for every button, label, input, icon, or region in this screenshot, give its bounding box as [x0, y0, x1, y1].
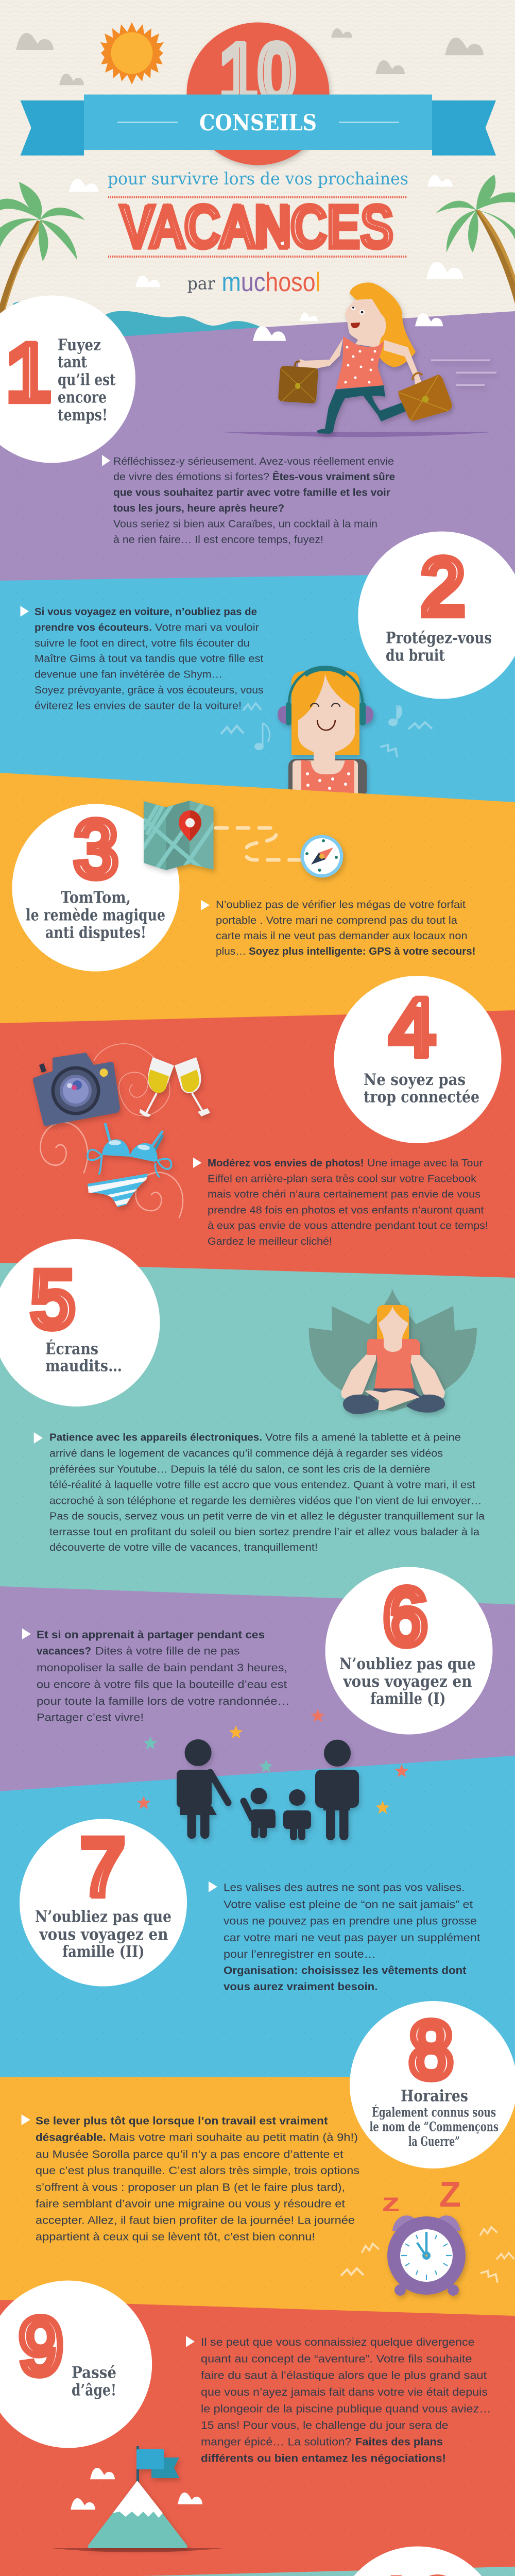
text: conseil 1: que vous souhaitez partir avec votre famille et les voir [113, 486, 390, 499]
number 7: 7 [80, 1821, 126, 1913]
number 6: 6 [383, 1570, 428, 1663]
icon: alarm clock [387, 2215, 466, 2296]
text: conseil 9: Faites des plans [355, 2436, 443, 2448]
text: conseil 8: faire semblant d’avoir une migraine ou vous y résoudre et [36, 2197, 345, 2210]
panel: conseil 1 [0, 282, 515, 582]
text: conseil 8: Se lever plus tôt que lorsque l’on travail est vraiment [36, 2114, 328, 2127]
circle: conseil 10 [334, 2546, 502, 2576]
panel: conseil 10 [0, 2546, 515, 2576]
illustration: running woman [219, 282, 496, 437]
text: conseil 7 [224, 1882, 480, 1993]
text: conseil 2: Maître Gims à tout va tandis que votre fille est [35, 653, 264, 665]
text: conseil 1: tous les jours, heure après heure? [113, 502, 284, 514]
text: conseil 3: N’oubliez pas de vérifier les mégas de votre forfait [216, 899, 466, 911]
text: conseil 5: terrasse tout en profitant du soleil ou bien sortez prendre l’air et allez vous balader à la [49, 1526, 480, 1538]
ribbon: conseils: CONSEILS [199, 110, 317, 136]
heading: passé d'âge: Passé [72, 2364, 116, 2382]
text: conseil 8: au Musée Sorolla parce qu’il n’y a pas encore d’attente et [36, 2148, 344, 2160]
panel: conseil 5 [0, 1239, 515, 1607]
text: conseil 8: s’offrent à vous : proposer un plan B (et le faire plus tard), [36, 2181, 345, 2193]
text: conseil 8: appartient à ceux qui se lèvent tôt, c’est bien connu! [36, 2230, 315, 2243]
text: conseil 5: accroché à son téléphone et regarde les dernières vidéos que l’on vient de lui envoyer… [49, 1495, 482, 1506]
text: conseil 4: mais votre chéri n’aura certainement pas envie de vous [208, 1189, 480, 1200]
circle: conseil 1 [0, 296, 135, 463]
text: conseil 5: Patience avec les appareils électroniques. [49, 1432, 262, 1444]
text: conseil 8 [36, 2114, 359, 2243]
heading: protégez-vous du bruit [386, 629, 492, 665]
icon: sleeping z letters: z [382, 2188, 400, 2217]
number 4: 4 [389, 981, 435, 1073]
text: conseil 9: manger épicé… La solution? [201, 2436, 351, 2448]
text: conseil 7: vous ne pouvez pas en prendre une plus grosse [224, 1915, 477, 1927]
text: conseil 3: plus… [216, 945, 246, 957]
circle: conseil 8 [350, 2001, 515, 2168]
text: conseil 2: prendre vos écouteurs. [35, 621, 152, 634]
heading: n'oubliez pas que vous voyagez en famille (II): vous voyagez en [39, 1925, 168, 1944]
text: conseil 2 [35, 606, 264, 712]
arrow: dashed route [216, 828, 301, 860]
text: conseil 5 [49, 1432, 485, 1553]
divider: top dots [108, 196, 407, 198]
panel: conseil 8 [0, 2001, 515, 2318]
arrow [209, 1882, 217, 1892]
text: conseil 7: car votre mari ne veut pas payer un supplément [224, 1931, 480, 1944]
panel: conseil 6 [0, 1567, 515, 1793]
text: conseil 1: Êtes-vous vraiment sûre [272, 470, 395, 483]
decorative zigzags: clock [341, 2226, 514, 2283]
heading: tomtom [26, 889, 165, 942]
title: vacances: VACANCES [121, 193, 393, 260]
text: conseil 5: préférées sur Youtube… Depuis la télé du salon, ce sont les cris de la dernière [49, 1463, 431, 1475]
heading: n'oubliez pas que vous voyagez en famille (I): vous voyagez en [343, 1672, 472, 1691]
text: conseil 2: suivre le foot en direct, votre fils écouter du [35, 637, 250, 649]
heading: écrans maudits: Écrans [45, 1338, 98, 1358]
icon: camera [33, 1053, 120, 1126]
text: conseil 4: prendre 48 fois en photos et vos enfants n’auront quant [208, 1204, 484, 1216]
icon: champagne glasses [139, 1057, 210, 1117]
panel: conseil 2 [0, 532, 515, 804]
text: conseil 1 [113, 455, 395, 546]
panel: conseil 4 [0, 976, 515, 1280]
text: conseil 4: Eiffel en arrière-plan sera très cool sur votre Facebook [208, 1173, 477, 1184]
text: conseil 2: éviterez les envies de sauter de la voiture! [35, 700, 242, 712]
icon: sun [100, 22, 164, 84]
text: conseil 5: découverte de votre ville de vacances, tranquillement! [49, 1541, 318, 1553]
badge: 10: 10 [219, 26, 296, 118]
panel: conseil 9 [0, 2280, 515, 2576]
circle: conseil 3 [12, 804, 179, 972]
text: conseil 7: pour l’enregistrer en soute… [224, 1948, 376, 1960]
heading: fuyez tant qu'il est encore temps: tant [58, 353, 88, 371]
text: conseil 2: devenue une fan invétérée de Shym… [35, 669, 222, 681]
illustration: meditating woman [309, 1289, 477, 1414]
heading: tomtom: TomTom, [61, 889, 131, 907]
heading: n'oubliez pas que vous voyagez en famille (I): famille (I) [370, 1690, 446, 1708]
icon: compass [301, 835, 343, 878]
text: conseil 1: de vivre des émotions si fortes? [113, 471, 269, 483]
text: conseil 6 [37, 1629, 289, 1724]
number 9: 9 [18, 2300, 64, 2392]
number 8: 8 [408, 2004, 454, 2096]
icon: sleeping z letters [382, 2174, 461, 2217]
text: conseil 8: accepter. Allez, il faut bien profiter de la journée! La journée [36, 2214, 355, 2227]
number 4: 4 [389, 981, 435, 1073]
text: conseil 5: télé-réalité à laquelle votre fille est accro que vous entendez. Quant à votre mari, il est [49, 1479, 475, 1490]
text: conseil 8: Mais votre mari souhaite au petit matin (à 9h!) [109, 2131, 358, 2144]
heading: protégez-vous du bruit: Protégez-vous [386, 629, 492, 647]
heading: horaires: Horaires [401, 2087, 468, 2105]
text: conseil 6: Dites à votre fille de ne pas [95, 1645, 240, 1657]
number 6: 6 [383, 1570, 428, 1663]
icon: bikini [85, 1123, 171, 1216]
heading: écrans maudits [45, 1338, 122, 1376]
heading: passé d'âge [72, 2364, 116, 2399]
clouds: over purple edge [253, 313, 443, 341]
text: conseil 9 [201, 2336, 491, 2465]
illustration: right palm tree [436, 175, 515, 304]
number 5: 5 [30, 1253, 76, 1345]
icon: stars [137, 1709, 409, 1814]
icon: map with pin [143, 801, 217, 875]
text: conseil 2: Si vous voyagez en voiture, n’oubliez pas de [35, 606, 257, 618]
text: conseil 7: Les valises des autres ne sont pas vos valises. [224, 1882, 465, 1894]
text: conseil 8: désagréable. [36, 2131, 106, 2144]
arrow [201, 900, 210, 910]
text: conseil 3: carte mais il ne veut pas demander aux locaux non [216, 930, 468, 942]
title: pour survivre lors de vos prochaines: pour survivre lors de vos prochaines [108, 168, 408, 189]
arrow [21, 606, 29, 617]
text: conseil 6: ou encore à votre fils que la bouteille d’eau est [37, 1679, 287, 1691]
text: conseil 9: quant au concept de “aventure”. Votre fils souhaite [201, 2353, 472, 2365]
arrow [186, 2336, 195, 2347]
number 2: 2 [420, 540, 466, 633]
number 7: 7 [80, 1821, 126, 1913]
arrow [193, 1158, 202, 1168]
clouds: header [16, 28, 484, 287]
text: conseil 4: Gardez le meilleur cliché! [208, 1235, 332, 1247]
arrow [22, 2114, 30, 2125]
logo: par muchosol: muchosol [221, 267, 320, 297]
text: conseil 6: vacances? [37, 1645, 91, 1657]
heading: écrans maudits: maudits… [45, 1357, 122, 1376]
circle: conseil 5 [0, 1239, 160, 1406]
text: conseil 9: Il se peut que vous connaissiez quelque divergence [201, 2336, 475, 2348]
text: conseil 1: à ne rien faire… Il est encore temps, fuyez! [113, 534, 323, 546]
number 3: 3 [73, 803, 119, 895]
heading: n'oubliez pas que vous voyagez en famille (II): famille (II) [62, 1942, 145, 1961]
ribbon: conseils [21, 95, 496, 156]
heading: tomtom: anti disputes! [45, 924, 146, 942]
text: conseil 7: Votre valise est pleine de “on ne sait jamais” et [224, 1898, 473, 1910]
text: conseil 6: pour toute la famille lors de votre randonnée… [37, 1695, 289, 1707]
text: conseil 5: Pas de soucis, servez vous un petit verre de vin et allez le déguster tranquillement sur la [49, 1510, 485, 1522]
heading: n'oubliez pas que vous voyagez en famille (II) [35, 1908, 171, 1961]
number 2: 2 [420, 540, 466, 633]
text: conseil 7: Organisation: choisissez les vêtements dont [224, 1964, 467, 1977]
text: conseil 9: différents ou bien entamez les négociations! [201, 2452, 446, 2465]
circle: conseil 7 [20, 1819, 187, 1987]
number 3: 3 [73, 803, 119, 895]
arrow [34, 1432, 43, 1444]
illustration: mountain with flag [51, 2446, 224, 2552]
text: conseil 6: Partager c’est vivre! [37, 1711, 144, 1724]
text: conseil 9: faire du saut à l’élastique alors que le plus grand saut [201, 2369, 487, 2382]
text: conseil 9: que vous n’ayez jamais fait dans votre vie était depuis [201, 2386, 488, 2398]
text: conseil 9: 15 ans! Pour vous, le challenge du jour sera de [201, 2419, 448, 2431]
panel: header background [0, 0, 515, 361]
text: conseil 1: Réfléchissez-y sérieusement. Avez-vous réellement envie [113, 455, 394, 467]
text: conseil 6: monopoliser la salle de bain pendant 3 heures, [37, 1662, 287, 1674]
text: conseil 5: arrivé dans le logement de vacances qu’il commence déjà à regarder ses vidéos [49, 1447, 443, 1459]
text: conseil 5: Votre fils a amené la tablette et à peine [265, 1432, 461, 1444]
heading: fuyez tant qu'il est encore temps: encore [58, 388, 107, 407]
icon: sleeping z letters: Z [439, 2174, 461, 2214]
text: conseil 6: Et si on apprenait à partager pendant ces [37, 1629, 265, 1641]
circle: conseil 9 [0, 2280, 152, 2448]
heading: fuyez tant qu'il est encore temps: Fuyez [58, 336, 101, 354]
text: conseil 4 [208, 1157, 488, 1247]
illustration: left palm tree [0, 182, 85, 330]
decorative swirls: conseil 4 [40, 1044, 183, 1218]
arrow [102, 455, 110, 466]
heading: fuyez tant qu'il est encore temps: temps! [58, 406, 108, 425]
number 1: 1 [6, 326, 51, 418]
heading: ne soyez pas trop connectée [364, 1071, 479, 1106]
panel: conseil 7 [0, 1709, 515, 2081]
text: conseil 7: vous aurez vraiment besoin. [224, 1980, 377, 1993]
text: conseil 4: Une image avec la Tour [367, 1157, 483, 1169]
heading: n'oubliez pas que vous voyagez en famille (II): N’oubliez pas que [35, 1908, 171, 1926]
illustration: family [177, 1739, 359, 1840]
number 8: 8 [408, 2004, 454, 2096]
badge: 10: 10 [219, 26, 296, 118]
heading: horaires [370, 2087, 499, 2149]
text: conseil 8: que c’est plus tranquille. C’est alors très simple, trois options [36, 2164, 359, 2177]
title: vacances: VACANCES [121, 193, 393, 260]
circle: conseil 2 [358, 532, 515, 699]
text: conseil 4: à eux pas envie de vous attendre pendant tout ce temps! [208, 1220, 488, 1232]
heading: fuyez tant qu'il est encore temps: qu’il est [58, 371, 116, 389]
text: conseil 9: le plongeoir de la piscine publique quand vous aviez… [201, 2402, 491, 2415]
text: conseil 1: Vous seriez si bien aux Caraïbes, un cocktail à la main [113, 518, 377, 530]
heading: tomtom: le remède magique [26, 906, 165, 925]
number 5: 5 [30, 1253, 76, 1345]
heading: fuyez tant qu'il est encore temps [58, 336, 116, 425]
number 1: 1 [6, 326, 51, 418]
text: conseil 2: Soyez prévoyante, grâce à vos écouteurs, vous [35, 684, 264, 696]
divider: bottom dots [108, 256, 407, 258]
illustration: sea [13, 302, 263, 350]
text: conseil 3: Soyez plus intelligente: GPS à votre secours! [249, 945, 476, 957]
arrow [22, 1629, 31, 1639]
panel: conseil 3 [0, 773, 515, 1025]
text: conseil 2: Votre mari va vouloir [155, 621, 259, 634]
heading: protégez-vous du bruit: du bruit [386, 647, 445, 665]
heading: n'oubliez pas que vous voyagez en famille (I): N’oubliez pas que [339, 1655, 476, 1673]
heading: passé d'âge: d’âge! [72, 2381, 116, 2399]
heading: horaires: la Guerre” [408, 2134, 460, 2149]
text: conseil 3 [216, 899, 476, 957]
heading: n'oubliez pas que vous voyagez en famille (I) [339, 1655, 476, 1708]
heading: ne soyez pas trop connectée: trop connectée [364, 1088, 479, 1106]
circle: conseil 6 [325, 1567, 492, 1734]
logo: par muchosol: par [187, 274, 215, 294]
number 9: 9 [18, 2300, 64, 2392]
text: conseil 3: portable . Votre mari ne comprend pas du tout la [216, 914, 458, 926]
badge: 10 [186, 23, 330, 165]
circle: conseil 4 [334, 976, 502, 1143]
illustration: woman with headphones [221, 668, 432, 799]
text: conseil 4: Modérez vos envies de photos! [208, 1157, 364, 1169]
heading: ne soyez pas trop connectée: Ne soyez pas [364, 1071, 466, 1089]
